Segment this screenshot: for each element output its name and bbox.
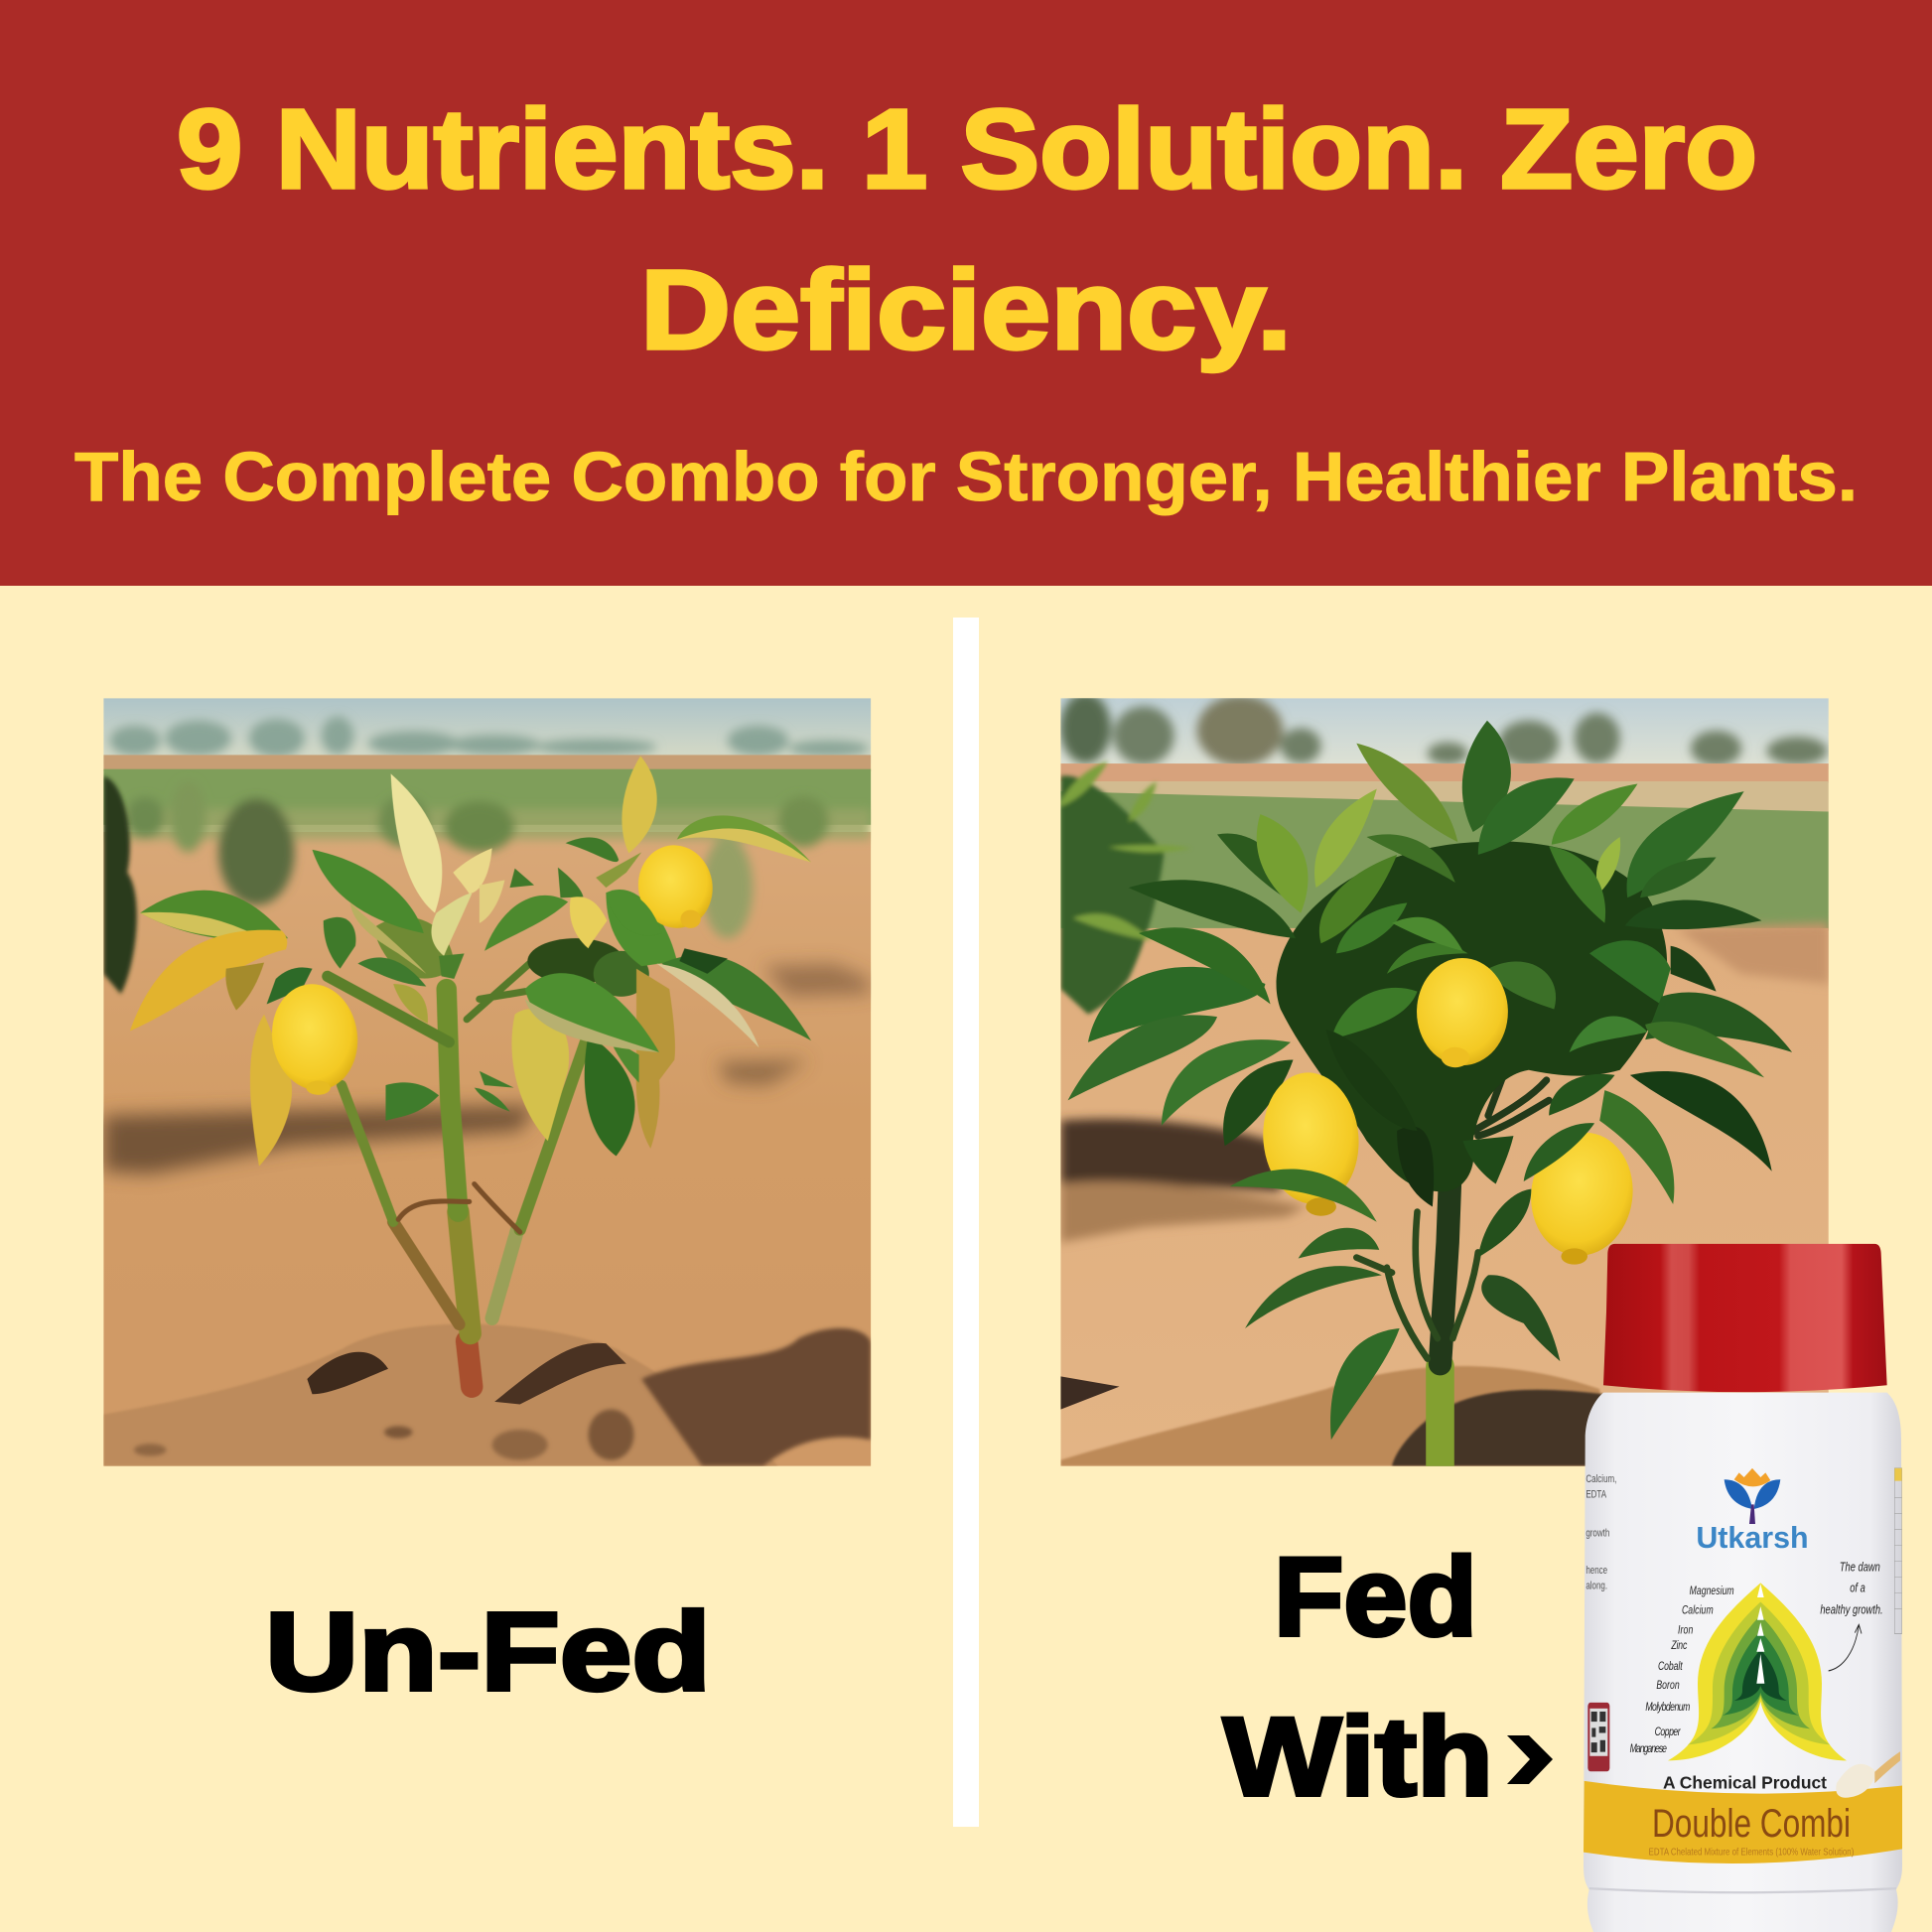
yellow label band xyxy=(1584,1781,1902,1863)
jar cap xyxy=(1603,1244,1887,1392)
nutrient list: Molybdenum xyxy=(1645,1702,1691,1715)
nutrient list: Zinc xyxy=(1670,1640,1688,1652)
nutrient list: Manganese xyxy=(1630,1743,1667,1756)
soil mound xyxy=(1060,1366,1604,1466)
photo: fed lemon plant xyxy=(1060,693,1829,1466)
label: fed with xyxy=(1223,1535,1493,1819)
label: fed with: Fed xyxy=(1274,1535,1477,1659)
side label text xyxy=(1586,1473,1616,1592)
side label text: growth xyxy=(1586,1527,1609,1540)
QR code xyxy=(1587,1703,1609,1771)
product type: A Chemical Product xyxy=(1663,1774,1827,1793)
header banner xyxy=(0,0,1932,586)
title line one: 9 Nutrients. 1 Solution. Zero xyxy=(177,86,1757,211)
subtitle: The Complete Combo for Stronger, Healthier Plants. xyxy=(74,438,1858,515)
foliage xyxy=(1068,721,1792,1207)
tagline: healthy growth. xyxy=(1820,1603,1883,1617)
brand name: Utkarsh xyxy=(1696,1521,1809,1555)
title line two: Deficiency. xyxy=(640,247,1292,372)
stems xyxy=(328,959,589,1387)
leaves xyxy=(130,756,811,1167)
side label text: along. xyxy=(1586,1581,1607,1592)
product name: Double Combi xyxy=(1652,1802,1851,1846)
nutrient list: Magnesium xyxy=(1690,1586,1734,1598)
label: fed with: With xyxy=(1223,1695,1493,1819)
lower leaves xyxy=(1230,1123,1594,1440)
product descriptor: EDTA Chelated Mixture of Elements (100% Water Solution) xyxy=(1649,1846,1854,1858)
product jar: Double Combi xyxy=(1584,1244,1902,1932)
nutrient list: Boron xyxy=(1656,1680,1680,1693)
nutrient list: Calcium xyxy=(1682,1604,1714,1617)
side label text: EDTA xyxy=(1586,1488,1607,1501)
trunk xyxy=(1356,1075,1549,1466)
nutrient list: Copper xyxy=(1655,1726,1681,1738)
nutrient list: Iron xyxy=(1678,1624,1694,1637)
lemons xyxy=(1258,958,1641,1265)
jar body xyxy=(1584,1393,1902,1932)
nutrition table edge xyxy=(1894,1468,1902,1634)
tagline arrow xyxy=(1829,1624,1862,1671)
nutrient list xyxy=(1630,1586,1734,1756)
side label text: hence xyxy=(1586,1565,1607,1578)
side label text: Calcium, xyxy=(1586,1473,1616,1485)
leaf over lemon xyxy=(606,893,657,922)
lemons xyxy=(265,839,719,1096)
brand logo xyxy=(1725,1468,1780,1524)
nutrient list: Cobalt xyxy=(1658,1661,1684,1673)
centre divider xyxy=(953,618,979,1827)
tagline: of a xyxy=(1850,1582,1865,1595)
tagline xyxy=(1820,1561,1883,1617)
tagline: The dawn xyxy=(1840,1561,1880,1575)
nested leaf emblem xyxy=(1668,1583,1847,1760)
powder spoon xyxy=(1836,1751,1900,1798)
soil mound xyxy=(103,1323,871,1466)
jar rim lines xyxy=(1589,1888,1896,1892)
photo: un-fed lemon plant xyxy=(103,698,871,1466)
label: un-fed: Un-Fed xyxy=(265,1589,711,1714)
background bush xyxy=(1060,761,1192,1015)
arrow: chevron to product xyxy=(1507,1735,1553,1784)
